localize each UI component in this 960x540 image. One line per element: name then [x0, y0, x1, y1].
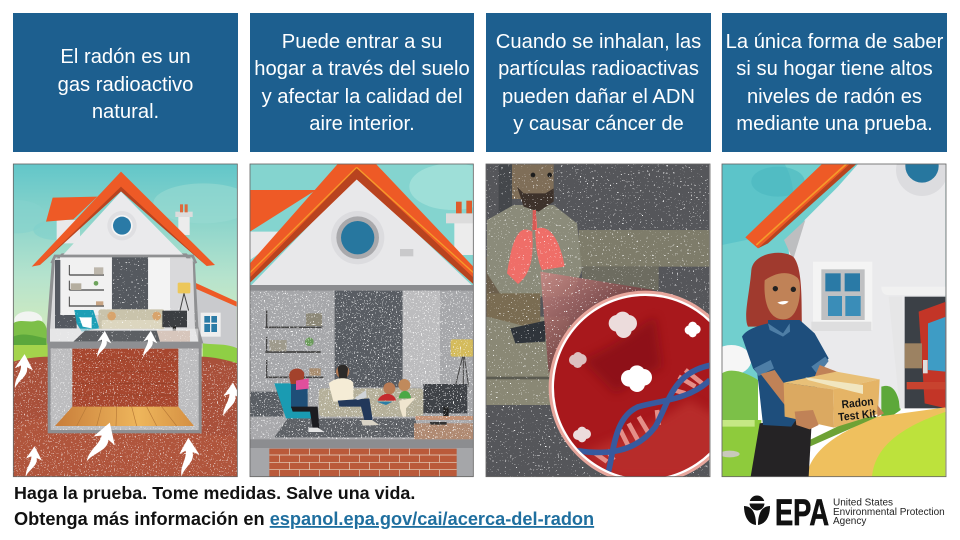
radon speckle indoors	[55, 308, 197, 342]
woman	[742, 253, 841, 477]
radon speckle in air	[250, 291, 473, 439]
lamp	[451, 339, 473, 390]
blue chair	[74, 310, 99, 332]
EPA logo: United States	[833, 498, 893, 508]
panel: caption 3: Cuando se inhalan, las	[496, 31, 701, 53]
soil	[13, 357, 237, 477]
panel: family indoors with radon in the air	[250, 163, 496, 478]
panel: caption 2: y afectar la calidad del	[262, 86, 462, 108]
panel: caption 4: La única forma de saber	[726, 31, 944, 53]
man with laptop	[329, 365, 379, 426]
EPA logo	[744, 491, 945, 533]
back roof	[250, 190, 316, 260]
panel: caption 1: natural.	[92, 101, 159, 123]
house window	[811, 262, 872, 331]
EPA logo: EPA	[775, 491, 829, 533]
house walls and roof	[32, 172, 215, 348]
back left roof	[46, 197, 97, 243]
DNA helix	[577, 365, 710, 473]
tv unit	[414, 384, 473, 439]
panel: caption 2: Puede entrar a su	[282, 31, 442, 53]
panel: caption 3: partículas radioactivas	[498, 58, 699, 80]
panel: caption 1	[13, 13, 238, 152]
EPA logo: Agency	[833, 516, 866, 527]
panel: caption 1: El radón es un	[60, 46, 191, 68]
roof	[745, 164, 856, 248]
panel: caption 4	[722, 13, 947, 152]
lungs	[507, 210, 565, 284]
cone of magnification	[540, 272, 654, 373]
panel: house cutaway with radon entering from soil	[12, 164, 238, 478]
panel: caption 4: si su hogar tiene altos	[736, 58, 933, 80]
bushes and lawn	[711, 345, 901, 477]
panel: inhaled particles damage lungs and DNA	[486, 164, 710, 478]
round window	[331, 211, 413, 264]
children	[377, 379, 416, 417]
chimney	[175, 204, 193, 235]
chimney	[446, 201, 473, 255]
panel: caption 2: hogar a través del suelo	[254, 58, 470, 80]
icon: EPA flower	[744, 496, 770, 525]
panel: caption 3	[486, 13, 711, 152]
porch and door	[881, 287, 946, 408]
radon clusters	[569, 312, 701, 442]
sofa	[98, 309, 165, 329]
round window	[896, 144, 948, 196]
panel: caption 4: mediante una prueba.	[736, 113, 933, 135]
call to action text: Haga la prueba. Tome medidas. Salve una vida.	[14, 483, 415, 503]
box: radon test kit	[784, 372, 884, 429]
bushes and grass	[13, 311, 237, 363]
call to action text: Obtenga más información en espanol.epa.gov/cai/acerca-del-radon	[14, 509, 594, 529]
air particles	[486, 164, 710, 477]
house wall	[789, 164, 946, 408]
EPA logo: Environmental Protection	[833, 507, 945, 518]
box: radon test kit: Test Kit	[838, 408, 877, 424]
path	[806, 407, 946, 477]
panel: caption 2: aire interior.	[309, 113, 415, 135]
man	[487, 164, 582, 343]
gable wall	[250, 177, 473, 287]
panel: caption 4: niveles de radón es	[747, 86, 922, 108]
main roof	[32, 172, 215, 267]
woman reading	[274, 369, 325, 432]
window	[107, 211, 137, 240]
back right house	[195, 283, 237, 348]
arrows rising from soil	[15, 331, 241, 477]
panel: caption 3: y causar cáncer de	[513, 113, 684, 135]
room	[250, 285, 473, 448]
roof	[250, 164, 473, 284]
basement	[48, 342, 202, 433]
sofa	[319, 388, 424, 417]
panel: caption 1: gas radioactivo	[58, 74, 193, 96]
panel: caption 2	[250, 13, 474, 152]
panel: woman holding radon test kit	[722, 164, 946, 478]
magnified circle with DNA	[548, 290, 710, 476]
foundation brick	[250, 448, 473, 478]
tv and lamp	[157, 283, 190, 342]
call to action text	[14, 483, 594, 529]
panel: caption 3: pueden dañar el ADN	[502, 86, 695, 108]
box: radon test kit: Radon	[841, 396, 874, 411]
